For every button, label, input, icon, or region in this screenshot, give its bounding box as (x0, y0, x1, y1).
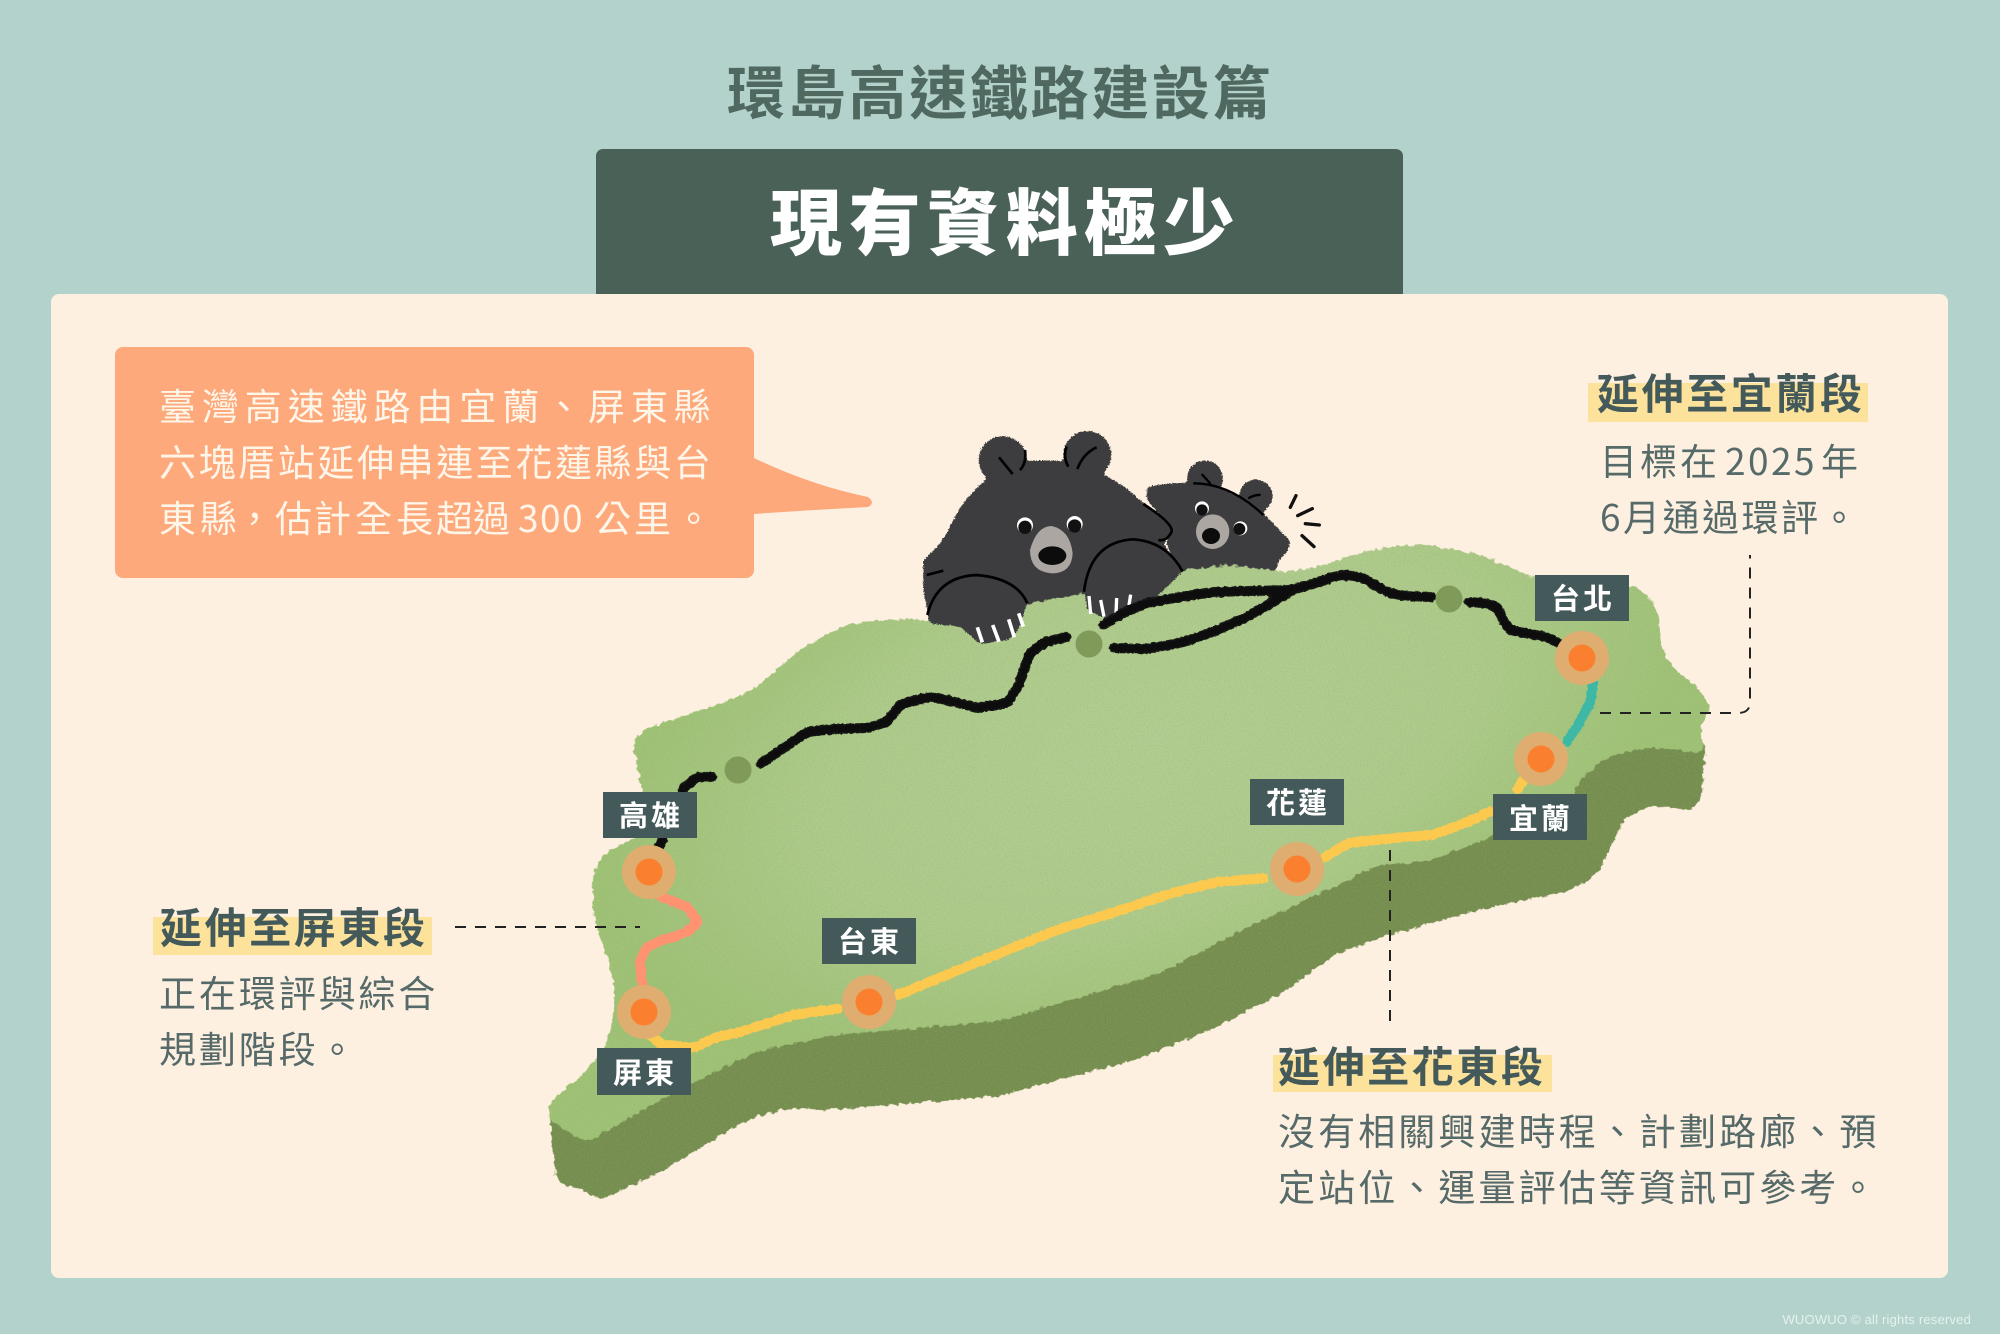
text block: Hualien-Taitung section (1273, 1034, 1880, 1212)
right paw (1084, 539, 1183, 619)
map: Taiwan (547, 544, 1712, 1201)
callout text: 東縣，估計全長超過300公里。 (159, 489, 712, 543)
text block: Hualien-Taitung section: 定站位、運量評估等資訊可參考。 (1278, 1158, 1880, 1212)
left paw (927, 575, 1027, 644)
label: Taitung (822, 918, 916, 964)
land top (547, 544, 1712, 1143)
label: Taipei: 台北 (1551, 576, 1615, 618)
station: Pingtung (617, 985, 671, 1039)
label: Hualien (1250, 779, 1344, 825)
callout text: 六塊厝站延伸串連至花蓮縣與台 (159, 433, 713, 487)
text block: Yilan section (1588, 361, 1868, 542)
station: Yilan (1514, 732, 1568, 786)
station: Hualien (1270, 842, 1324, 896)
text block: Yilan section: 目標在2025年 (1600, 432, 1858, 486)
label: Hualien: 花蓮 (1266, 780, 1330, 822)
text block: Yilan section: 6月通過環評。 (1600, 488, 1860, 542)
small bear (1147, 460, 1290, 580)
text block: Hualien-Taitung section: 沒有相關興建時程、計劃路廊、預 (1278, 1102, 1880, 1156)
label: Yilan (1493, 794, 1587, 840)
text block: Pingtung section (153, 895, 438, 1074)
station: central dot (1076, 630, 1102, 658)
stations (617, 586, 1609, 1039)
panel: main (51, 294, 1948, 1278)
route: Pingtung to Yilan (647, 775, 1527, 1048)
heading banner (596, 149, 1403, 304)
label: Pingtung (597, 1048, 691, 1095)
title: 環島高速鐵路建設篇 (727, 47, 1273, 131)
station: north dot (1436, 586, 1462, 612)
motion marks (1290, 496, 1319, 547)
station: south dot (724, 756, 752, 784)
callout text (159, 377, 717, 543)
route: Taipei to Yilan (1565, 680, 1594, 745)
label: Yilan: 宜蘭 (1509, 796, 1573, 838)
callout (115, 347, 872, 578)
bear paws (927, 539, 1183, 644)
station: Taipei (1555, 631, 1609, 685)
banner text: 現有資料極少 (770, 165, 1242, 270)
leader line: Hualien (1389, 850, 1391, 1030)
text block: Hualien-Taitung section: 延伸至花東段 (1278, 1034, 1546, 1095)
watermark: WUOWUO © all rights reserved (1782, 1312, 1971, 1327)
route: Kaohsiung to Pingtung (640, 890, 698, 993)
text block: Yilan section: 延伸至宜蘭段 (1597, 361, 1865, 422)
big bear (923, 431, 1180, 640)
leader line: Pingtung (455, 926, 640, 928)
station: Kaohsiung (622, 845, 676, 899)
label: Taipei (1535, 575, 1629, 621)
text block: Pingtung section: 正在環評與綜合 (159, 964, 438, 1018)
bears behind land (923, 431, 1319, 640)
label: Taitung: 台東 (838, 919, 902, 961)
label: Kaohsiung (603, 792, 697, 838)
station: Taitung (842, 975, 896, 1029)
label: Kaohsiung: 高雄 (619, 793, 683, 835)
text block: Pingtung section: 規劃階段。 (159, 1020, 358, 1074)
land side (549, 730, 1706, 1201)
route: existing line (657, 575, 1565, 850)
text block: Pingtung section: 延伸至屏東段 (160, 895, 428, 956)
label: Pingtung: 屏東 (613, 1050, 677, 1092)
leader line: Yilan (1600, 555, 1750, 713)
callout text: 臺灣高速鐵路由宜蘭、屏東縣 (159, 377, 717, 431)
